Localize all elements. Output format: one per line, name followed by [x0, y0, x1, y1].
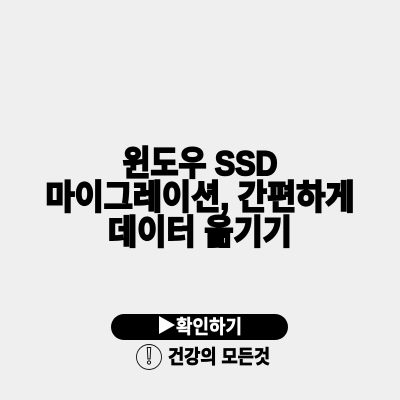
title line 1: 윈도우 SSD: [122, 145, 278, 183]
confirm button: [111, 312, 288, 340]
title: [46, 145, 354, 252]
brand name: 건강의 모든것: [168, 342, 270, 369]
icon: play triangle: [159, 316, 175, 334]
button label: 확인하기: [176, 312, 242, 339]
button pill: [111, 314, 288, 340]
title line 3: 데이터 옮기기: [108, 214, 292, 252]
icon: exclamation circle: [136, 344, 162, 370]
title line 2: 마이그레이션, 간편하게: [46, 179, 354, 217]
